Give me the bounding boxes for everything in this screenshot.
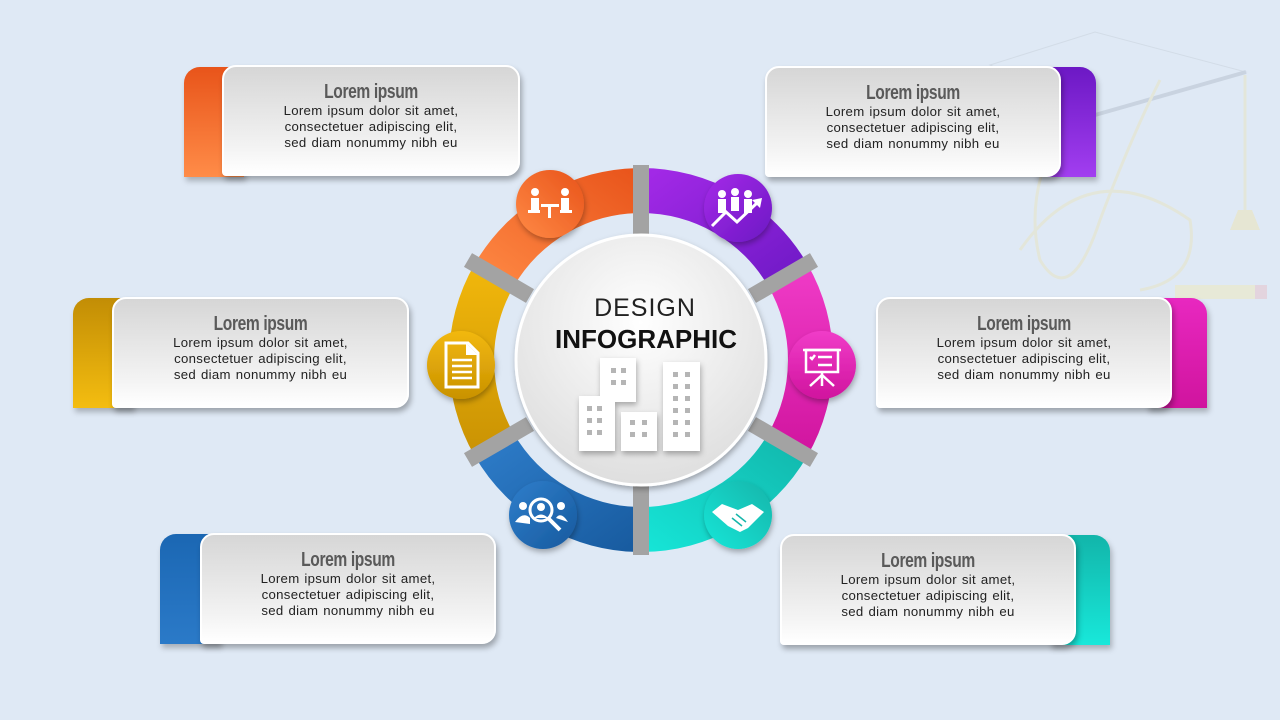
- icon: document (yellow): [427, 331, 495, 399]
- segment: yellow: [449, 264, 514, 456]
- card: middle-right: sed diam nonummy nibh eu: [937, 367, 1111, 382]
- icon: meeting (orange): [516, 170, 584, 238]
- card: bottom-right: consectetuer adipiscing elit,: [842, 588, 1014, 603]
- card: middle-right: Lorem ipsum: [977, 313, 1071, 335]
- card: top-left: Lorem ipsum: [324, 81, 418, 103]
- card: bottom-left: [200, 533, 496, 644]
- tab: yellow: [73, 298, 133, 408]
- card: top-right: [765, 66, 1061, 177]
- watermark: graduation cap: [989, 32, 1267, 299]
- icon: presentation (pink): [788, 331, 856, 399]
- center title: DESIGN: [594, 294, 696, 322]
- card: middle-left: Lorem ipsum dolor sit amet,: [173, 335, 348, 350]
- card: top-right: Lorem ipsum dolor sit amet,: [826, 104, 1000, 119]
- icon: buildings: [579, 358, 700, 451]
- segment: orange: [475, 168, 641, 286]
- card: top-left: [222, 65, 520, 176]
- tab: pink: [1147, 298, 1207, 408]
- card: bottom-left: Lorem ipsum dolor sit amet,: [261, 571, 435, 586]
- card: middle-right: [876, 297, 1172, 408]
- icon: growth team (purple): [704, 174, 772, 242]
- tab: orange: [184, 67, 244, 177]
- card: bottom-left: Lorem ipsum: [301, 549, 395, 571]
- card: middle-left: Lorem ipsum: [214, 313, 307, 335]
- card: bottom-right: Lorem ipsum: [881, 550, 975, 572]
- card: bottom-right: sed diam nonummy nibh eu: [841, 604, 1015, 619]
- card: middle-left: consectetuer adipiscing elit,: [174, 351, 347, 366]
- card: top-left: consectetuer adipiscing elit,: [285, 119, 457, 134]
- card: top-left: sed diam nonummy nibh eu: [284, 135, 458, 150]
- segment: teal: [641, 434, 807, 552]
- icon: handshake (teal): [704, 481, 772, 549]
- card: bottom-left: sed diam nonummy nibh eu: [261, 603, 435, 618]
- center circle: [516, 235, 766, 485]
- segment: pink: [768, 264, 833, 456]
- tab: teal: [1050, 535, 1110, 645]
- card: middle-left: [112, 297, 409, 408]
- card: top-left: Lorem ipsum dolor sit amet,: [284, 103, 458, 118]
- card: middle-right: Lorem ipsum dolor sit amet,: [937, 335, 1111, 350]
- tab: purple: [1036, 67, 1096, 177]
- card: middle-right: consectetuer adipiscing elit,: [938, 351, 1110, 366]
- card: top-right: Lorem ipsum: [866, 82, 960, 104]
- card: bottom-right: Lorem ipsum dolor sit amet,: [841, 572, 1015, 587]
- card: top-right: sed diam nonummy nibh eu: [826, 136, 1000, 151]
- tab: blue: [160, 534, 220, 644]
- card: top-right: consectetuer adipiscing elit,: [827, 120, 999, 135]
- dividers: [468, 165, 814, 555]
- segment: purple: [641, 168, 807, 286]
- card: bottom-right: [780, 534, 1076, 645]
- icon: search people (blue): [509, 481, 577, 549]
- card: middle-left: sed diam nonummy nibh eu: [174, 367, 347, 382]
- center circle: INFOGRAPHIC: [555, 324, 737, 354]
- card: bottom-left: consectetuer adipiscing elit,: [262, 587, 434, 602]
- segment: blue: [475, 434, 641, 552]
